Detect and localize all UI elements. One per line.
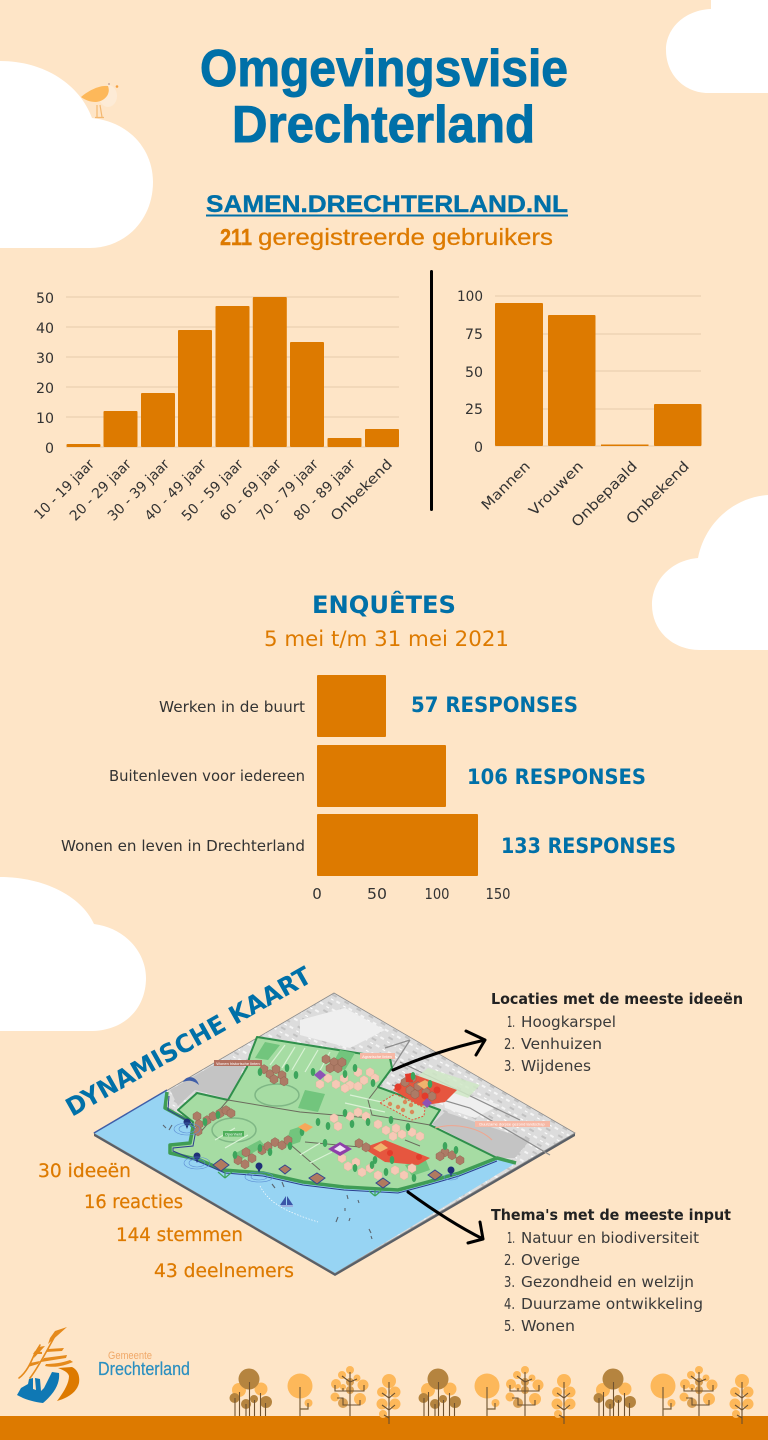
list: themes: Overige xyxy=(521,1251,580,1269)
arrow: themes xyxy=(408,1192,483,1243)
list: locations: Hoogkarspel xyxy=(521,1013,616,1031)
map reeds xyxy=(218,1171,381,1196)
subheading: registered users: geregistreerde gebruikers xyxy=(258,224,553,250)
heading: dynamic map: DYNAMISCHE KAART xyxy=(61,961,316,1122)
map ripples xyxy=(174,1123,458,1182)
list: themes: 4. xyxy=(504,1295,515,1313)
cloud: top left xyxy=(0,61,153,248)
tree row xyxy=(230,1366,718,1418)
list: locations: 1. xyxy=(507,1013,515,1031)
list: locations: Locaties met de meeste ideeën xyxy=(491,990,743,1008)
list: themes xyxy=(491,1206,731,1335)
arrow: locations xyxy=(393,1031,485,1070)
list: themes: Gezondheid en welzijn xyxy=(521,1273,694,1291)
map birds xyxy=(163,1125,372,1239)
list: themes: Thema's met de meeste input xyxy=(491,1206,731,1224)
bar chart: age groups: 30 xyxy=(36,351,54,367)
bar chart: survey responses: Wonen en leven in Drechterland xyxy=(61,837,305,855)
bar chart: age groups: 70 - 79 jaar xyxy=(254,456,322,524)
cloud: top right xyxy=(666,0,768,93)
list: locations: Wijdenes xyxy=(521,1057,591,1075)
list: themes: 2. xyxy=(504,1251,515,1269)
map red zone south xyxy=(363,1140,430,1165)
map grey streets xyxy=(300,1008,500,1118)
title: Omgevingsvisie xyxy=(200,40,568,98)
map tag: landschap: Duurzame dorpse gezond landschap xyxy=(479,1122,545,1126)
bar chart: gender: Onbekend xyxy=(624,459,693,528)
small trees on ground xyxy=(376,1374,754,1424)
statistics: 43 deelnemers xyxy=(154,1260,294,1282)
bar chart: age groups: 60 - 69 jaar xyxy=(217,456,285,524)
subheading: registered users: 211 xyxy=(220,224,252,250)
bar chart: age groups: 40 - 49 jaar xyxy=(142,456,210,524)
statistics xyxy=(38,1160,294,1282)
map large coastal markers xyxy=(213,1159,442,1188)
list: locations: 3. xyxy=(504,1057,515,1075)
bar chart: gender: Vrouwen xyxy=(526,459,587,519)
list: themes: Wonen xyxy=(521,1317,575,1335)
bar chart: survey responses: 106 RESPONSES xyxy=(467,765,646,789)
map orange hatch xyxy=(298,1123,313,1132)
list: locations: Venhuizen xyxy=(521,1035,602,1053)
logo: Gemeente Drechterland: Gemeente xyxy=(108,1350,152,1362)
isometric map xyxy=(94,993,575,1276)
map grey base xyxy=(94,993,575,1273)
map coastal dike xyxy=(165,1092,516,1190)
map tag: openheid: Openheid xyxy=(225,1132,242,1136)
bar chart: survey responses: Werken in de buurt xyxy=(159,698,305,716)
map red houses xyxy=(387,1073,440,1160)
subheading: survey dates: 5 mei t/m 31 mei 2021 xyxy=(264,627,509,651)
list: themes: 3. xyxy=(504,1273,515,1291)
bar chart: age groups: 20 xyxy=(36,381,54,397)
bar chart: age groups: 10 - 19 jaar xyxy=(31,456,98,523)
map fields xyxy=(232,1042,430,1176)
bar chart: age groups: 0 xyxy=(45,441,54,457)
bar chart: survey responses: 100 xyxy=(424,885,450,903)
heading: website link: SAMEN.DRECHTERLAND.NL xyxy=(206,191,568,218)
list: locations xyxy=(491,990,743,1075)
list: themes: Duurzame ontwikkeling xyxy=(521,1295,703,1313)
bar chart: age groups: 30 - 39 jaar xyxy=(105,456,173,524)
cloud: middle left xyxy=(0,877,146,1031)
bar chart: age groups: 40 xyxy=(36,321,54,337)
bar chart: gender: 75 xyxy=(465,327,483,343)
bar chart: survey responses: 57 RESPONSES xyxy=(411,693,578,717)
map tag: historische linten: Wonen historische linten xyxy=(216,1061,260,1066)
list: themes: Natuur en biodiversiteit xyxy=(521,1229,699,1247)
list: themes: 1. xyxy=(507,1229,515,1247)
bar chart: gender: 100 xyxy=(457,289,483,305)
bar chart: gender: Mannen xyxy=(479,459,534,514)
divider xyxy=(430,270,433,511)
bar chart: survey responses: Buitenleven voor iedereen xyxy=(109,767,305,785)
bar chart: survey responses xyxy=(61,675,676,903)
ground xyxy=(0,1416,768,1440)
statistics: 144 stemmen xyxy=(116,1224,243,1246)
map dashed field xyxy=(380,1094,425,1120)
map pink houses xyxy=(316,1068,424,1180)
bar chart: gender: 25 xyxy=(465,402,483,418)
icon: bird on cloud xyxy=(81,83,118,118)
bar chart: gender: 50 xyxy=(465,365,483,381)
map land xyxy=(170,1037,497,1190)
title xyxy=(200,40,568,154)
map red zone north xyxy=(415,1068,480,1098)
icon: kite xyxy=(183,1077,199,1085)
list: locations: 2. xyxy=(504,1035,515,1053)
title: Drechterland xyxy=(232,96,535,154)
heading: surveys: ENQUÊTES xyxy=(312,590,456,619)
bar chart: age groups xyxy=(31,291,399,524)
map brown houses xyxy=(193,1054,464,1169)
bar chart: age groups: 50 xyxy=(36,291,54,307)
bar chart: survey responses: 133 RESPONSES xyxy=(501,834,676,858)
bar chart: age groups: 50 - 59 jaar xyxy=(179,456,247,524)
bar chart: survey responses: 50 xyxy=(367,885,387,903)
map water xyxy=(94,1090,516,1273)
bar chart: age groups: 20 - 29 jaar xyxy=(67,456,135,524)
map slab edge xyxy=(94,1133,575,1276)
statistics: 30 ideeën xyxy=(38,1160,131,1182)
bar chart: gender xyxy=(457,289,702,531)
logo: Gemeente Drechterland xyxy=(17,1327,190,1403)
bar chart: gender: 0 xyxy=(474,440,483,456)
map trees xyxy=(203,1064,458,1182)
cloud: middle right xyxy=(652,495,768,650)
bar chart: age groups: 80 - 89 jaar xyxy=(291,456,359,524)
map sailboat xyxy=(280,1196,293,1207)
bar chart: survey responses: 150 xyxy=(486,885,510,903)
bar chart: gender: Onbepaald xyxy=(569,459,641,531)
map purple markers xyxy=(314,1070,432,1156)
map pins xyxy=(184,1118,454,1177)
bar chart: age groups: Onbekend xyxy=(328,457,396,524)
bar chart: age groups: 10 xyxy=(36,411,54,427)
map interior borders and roads xyxy=(198,1087,430,1170)
logo: Gemeente Drechterland: Drechterland xyxy=(98,1359,190,1379)
bar chart: survey responses: 0 xyxy=(312,885,322,903)
list: themes: 5. xyxy=(504,1317,515,1335)
statistics: 16 reacties xyxy=(84,1191,183,1213)
map tag: agrarische linten: Agrarische linten xyxy=(362,1054,392,1059)
